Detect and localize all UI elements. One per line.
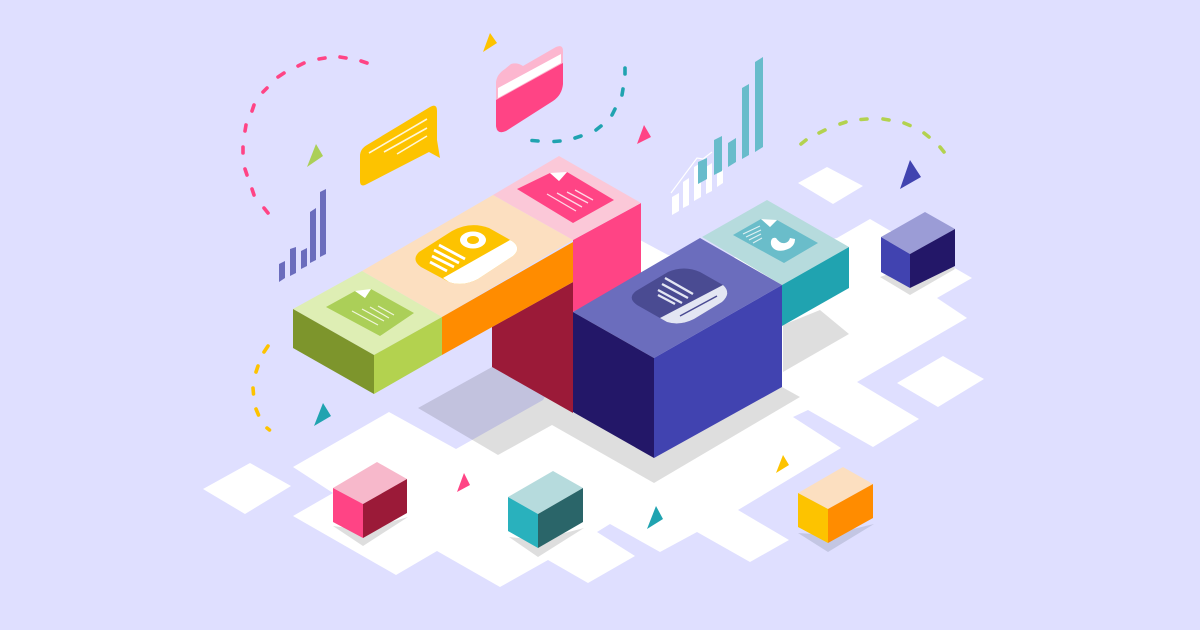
- dashed arc: teal: [532, 68, 625, 142]
- purple cube: [880, 212, 955, 295]
- bar chart: purple: [279, 189, 326, 282]
- teal cube: [508, 471, 584, 557]
- yellow card icon: [415, 225, 517, 284]
- orange block: [362, 195, 573, 355]
- teal document icon: [733, 219, 818, 263]
- large blue block: [573, 238, 782, 458]
- pink and maroon column: [492, 156, 641, 413]
- main block shadows: [418, 310, 849, 483]
- yellow cube: [798, 467, 874, 552]
- green block: [293, 271, 442, 394]
- navy card icon: [632, 268, 727, 323]
- decorative triangles: [307, 33, 921, 529]
- white floor: [203, 167, 984, 587]
- bar chart: white and teal with trend line: [671, 57, 763, 215]
- dashed arc: yellow: [253, 346, 270, 430]
- pink document icon: [517, 172, 614, 223]
- green document icon: [326, 289, 414, 336]
- pink cube: [333, 462, 408, 546]
- teal block: [702, 200, 849, 326]
- speech bubble: [360, 106, 440, 185]
- dashed arc: green: [801, 119, 944, 152]
- folder icon: [496, 46, 563, 132]
- dashed arc: pink: [243, 57, 367, 213]
